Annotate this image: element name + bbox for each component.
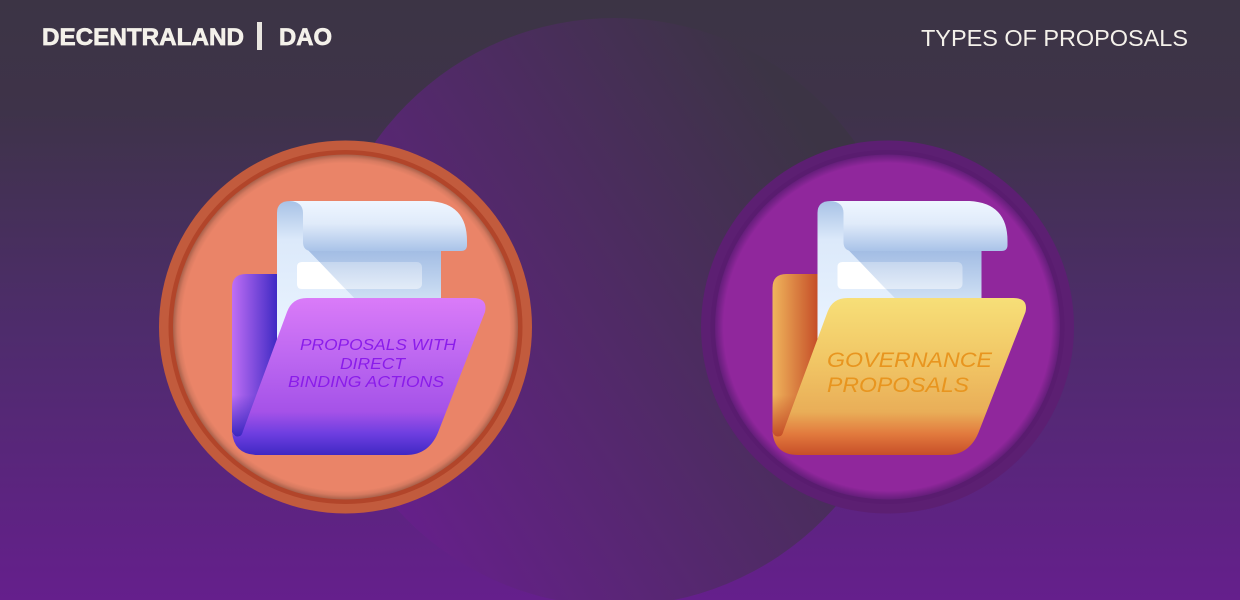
icon: purple folder with paper [232, 201, 486, 455]
title: DECENTRALAND | DAO [42, 22, 332, 51]
panel: proposals with direct binding actions [159, 140, 532, 514]
folder label: PROPOSALS WITH [300, 337, 456, 354]
badge circle: orange [159, 140, 532, 514]
folder label: BINDING ACTIONS [288, 374, 444, 391]
folder label: DIRECT [340, 356, 406, 373]
title: DECENTRALAND | DAO: DAO [279, 24, 332, 51]
icon: orange folder with paper [772, 201, 1026, 455]
folder label [827, 349, 993, 397]
folder label: PROPOSALS [827, 374, 969, 397]
panel: governance proposals [701, 140, 1074, 514]
heading: types of proposals: TYPES OF PROPOSALS [921, 25, 1188, 51]
folder label: GOVERNANCE [827, 349, 993, 372]
badge circle: purple [701, 140, 1074, 514]
background circle [321, 18, 909, 600]
title: DECENTRALAND | DAO: DECENTRALAND [42, 24, 244, 51]
folder label [288, 337, 456, 391]
